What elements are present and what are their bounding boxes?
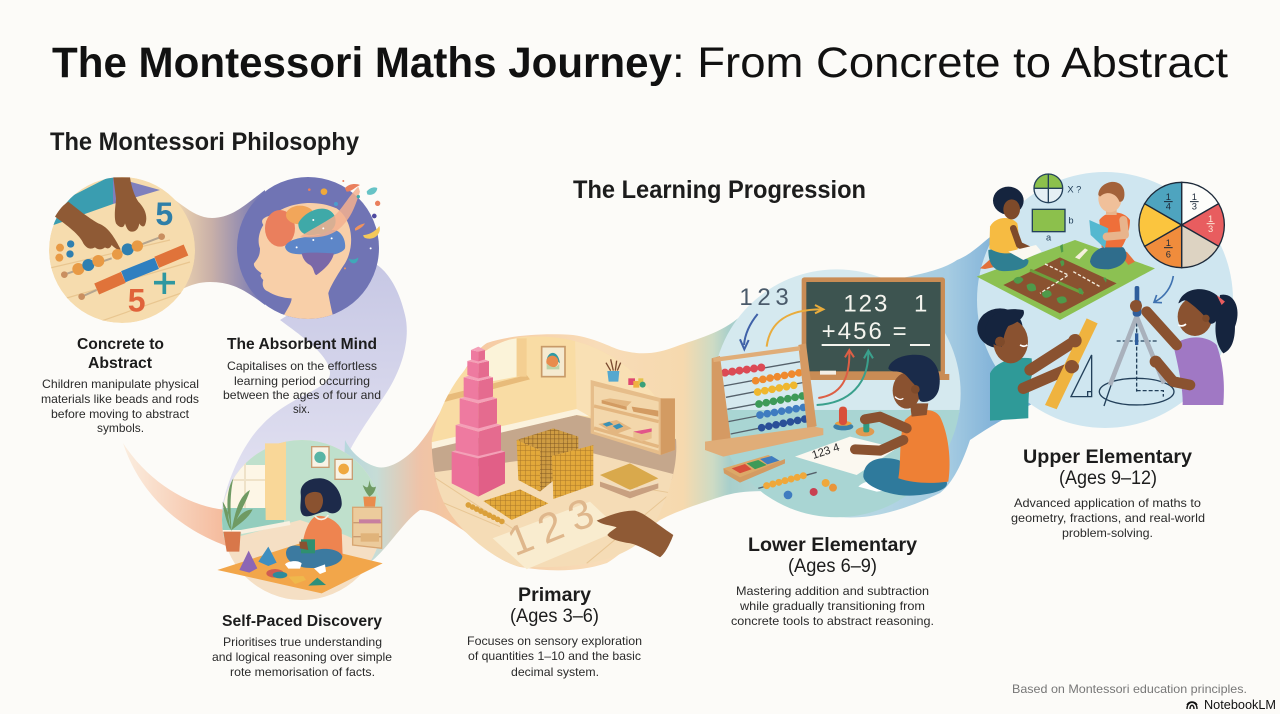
text: Concrete to Abstract [41,336,199,435]
area diagram circle and rectangle: X ? [1067,185,1081,195]
area diagram circle and rectangle [1032,174,1081,243]
text: Upper Elementary: (Ages 9–12) [1059,468,1157,489]
girl with compass [1130,289,1238,405]
text: Self-Paced Discovery: Self-Paced Discovery [222,613,382,630]
text: Self-Paced Discovery: rote memorisation of facts. [230,665,375,679]
footer note: Based on Montessori education principles. [1012,682,1247,696]
area diagram circle and rectangle: b [1068,215,1074,225]
text: Concrete to Abstract: Children manipulate physical [42,377,199,391]
title: : From Concrete to Abstract [672,39,1228,87]
chalkboard: 1 [914,291,927,318]
text: Self-Paced Discovery [212,613,392,679]
child with orange shirt [1089,182,1135,269]
text: The Absorbent Mind: between the ages of four and [223,388,381,402]
text: Upper Elementary: Advanced application of maths to [1014,496,1201,510]
fraction pie chart: 3 [1208,224,1213,234]
text: The Absorbent Mind: The Absorbent Mind [227,336,377,353]
text: Primary [467,585,642,679]
text: Upper Elementary: problem-solving. [1062,526,1153,540]
chalkboard [802,277,949,380]
text: Upper Elementary: Upper Elementary [1023,447,1192,468]
text: Lower Elementary: (Ages 6–9) [788,556,877,577]
ribbon: learning progression band [340,237,1040,580]
text: Concrete to Abstract: symbols. [97,421,144,435]
fraction pie chart [1139,182,1224,268]
triangle and geometry construction [1071,317,1174,406]
NotebookLM watermark: NotebookLM [1204,697,1276,712]
text: Lower Elementary: concrete tools to abstract reasoning. [731,614,934,628]
abacus [705,343,823,457]
garden plot [977,240,1155,320]
text: Primary: Focuses on sensory exploration [467,634,642,648]
area diagram circle and rectangle: a [1046,233,1052,243]
pink tower [452,347,505,497]
text: The Absorbent Mind: Capitalises on the effortless [227,359,377,373]
boy [855,355,950,496]
fraction pie chart: 1 [1166,192,1171,202]
ribbon: peach sweep [123,443,232,548]
text: Lower Elementary [731,535,934,628]
text: The Absorbent Mind: six. [293,402,310,416]
arrows [740,305,873,405]
wall picture [542,347,565,377]
title: The Montessori Maths Journey [52,39,672,87]
ribbon: lavender connector [221,262,407,512]
hand tracing number [597,511,673,557]
text: Primary: decimal system. [511,665,599,679]
fraction pie chart: 6 [1166,249,1171,259]
text: Concrete to Abstract: Concrete to [77,336,164,353]
text: Concrete to Abstract: before moving to abstract [51,407,190,421]
paper and stamp [795,407,897,475]
text: Primary: of quantities 1–10 and the basic [468,649,641,663]
wooden shelf [591,359,675,455]
sandpaper numbers board: 123 [501,488,600,565]
text: The Absorbent Mind [223,336,381,416]
text: Concrete to Abstract: materials like beads and rods [41,392,199,406]
text: Lower Elementary: Lower Elementary [748,535,917,556]
panel: Upper Elementary illustration [977,172,1238,428]
text: Self-Paced Discovery: and logical reasoning over simple [212,650,392,664]
chalkboard: 123 [843,291,887,318]
boy with ruler [977,308,1098,421]
heading: The Montessori Philosophy: The Montessori Philosophy [50,128,359,156]
panel: Lower Elementary illustration [705,267,977,523]
panel: Concrete to Abstract illustration: 5 [128,283,146,319]
text: The Absorbent Mind: learning period occurring [234,374,370,388]
text: Self-Paced Discovery: Prioritises true understanding [223,635,382,649]
golden bead materials [468,428,658,522]
panel: Primary illustration [432,336,676,570]
panel: Self-Paced Discovery illustration [218,440,382,600]
fraction pie chart: 3 [1192,201,1197,211]
panel: Concrete to Abstract illustration [45,175,265,325]
fraction pie chart: 1 [1208,214,1213,224]
fraction pie chart: 1 [1192,192,1197,202]
text: Upper Elementary: geometry, fractions, and real-world [1011,511,1205,525]
panel: The Absorbent Mind illustration [237,177,380,322]
paper and stamp: 123 4 [811,442,841,462]
text: Concrete to Abstract: Abstract [88,355,153,372]
text: Primary: (Ages 3–6) [510,606,599,627]
fraction pie chart: 4 [1166,201,1171,211]
text: Primary: Primary [518,585,591,606]
fraction pie chart: 1 [1166,238,1171,248]
title [52,39,1228,87]
text: Lower Elementary: while gradually transitioning from [739,599,925,613]
heading: The Learning Progression: The Learning Progression [573,176,866,204]
curved blue arrow [1154,276,1173,303]
compass [1110,286,1164,385]
neck connector [150,185,265,310]
panel: Concrete to Abstract illustration: 5 [155,196,173,232]
text: Lower Elementary: Mastering addition and subtraction [736,584,929,598]
chalkboard: +456 = [822,318,907,345]
colour tray and beads [723,455,837,499]
child with yellow shirt [980,187,1042,271]
text: Upper Elementary [1011,447,1205,540]
number text 1 2 3: 123 [739,284,789,311]
